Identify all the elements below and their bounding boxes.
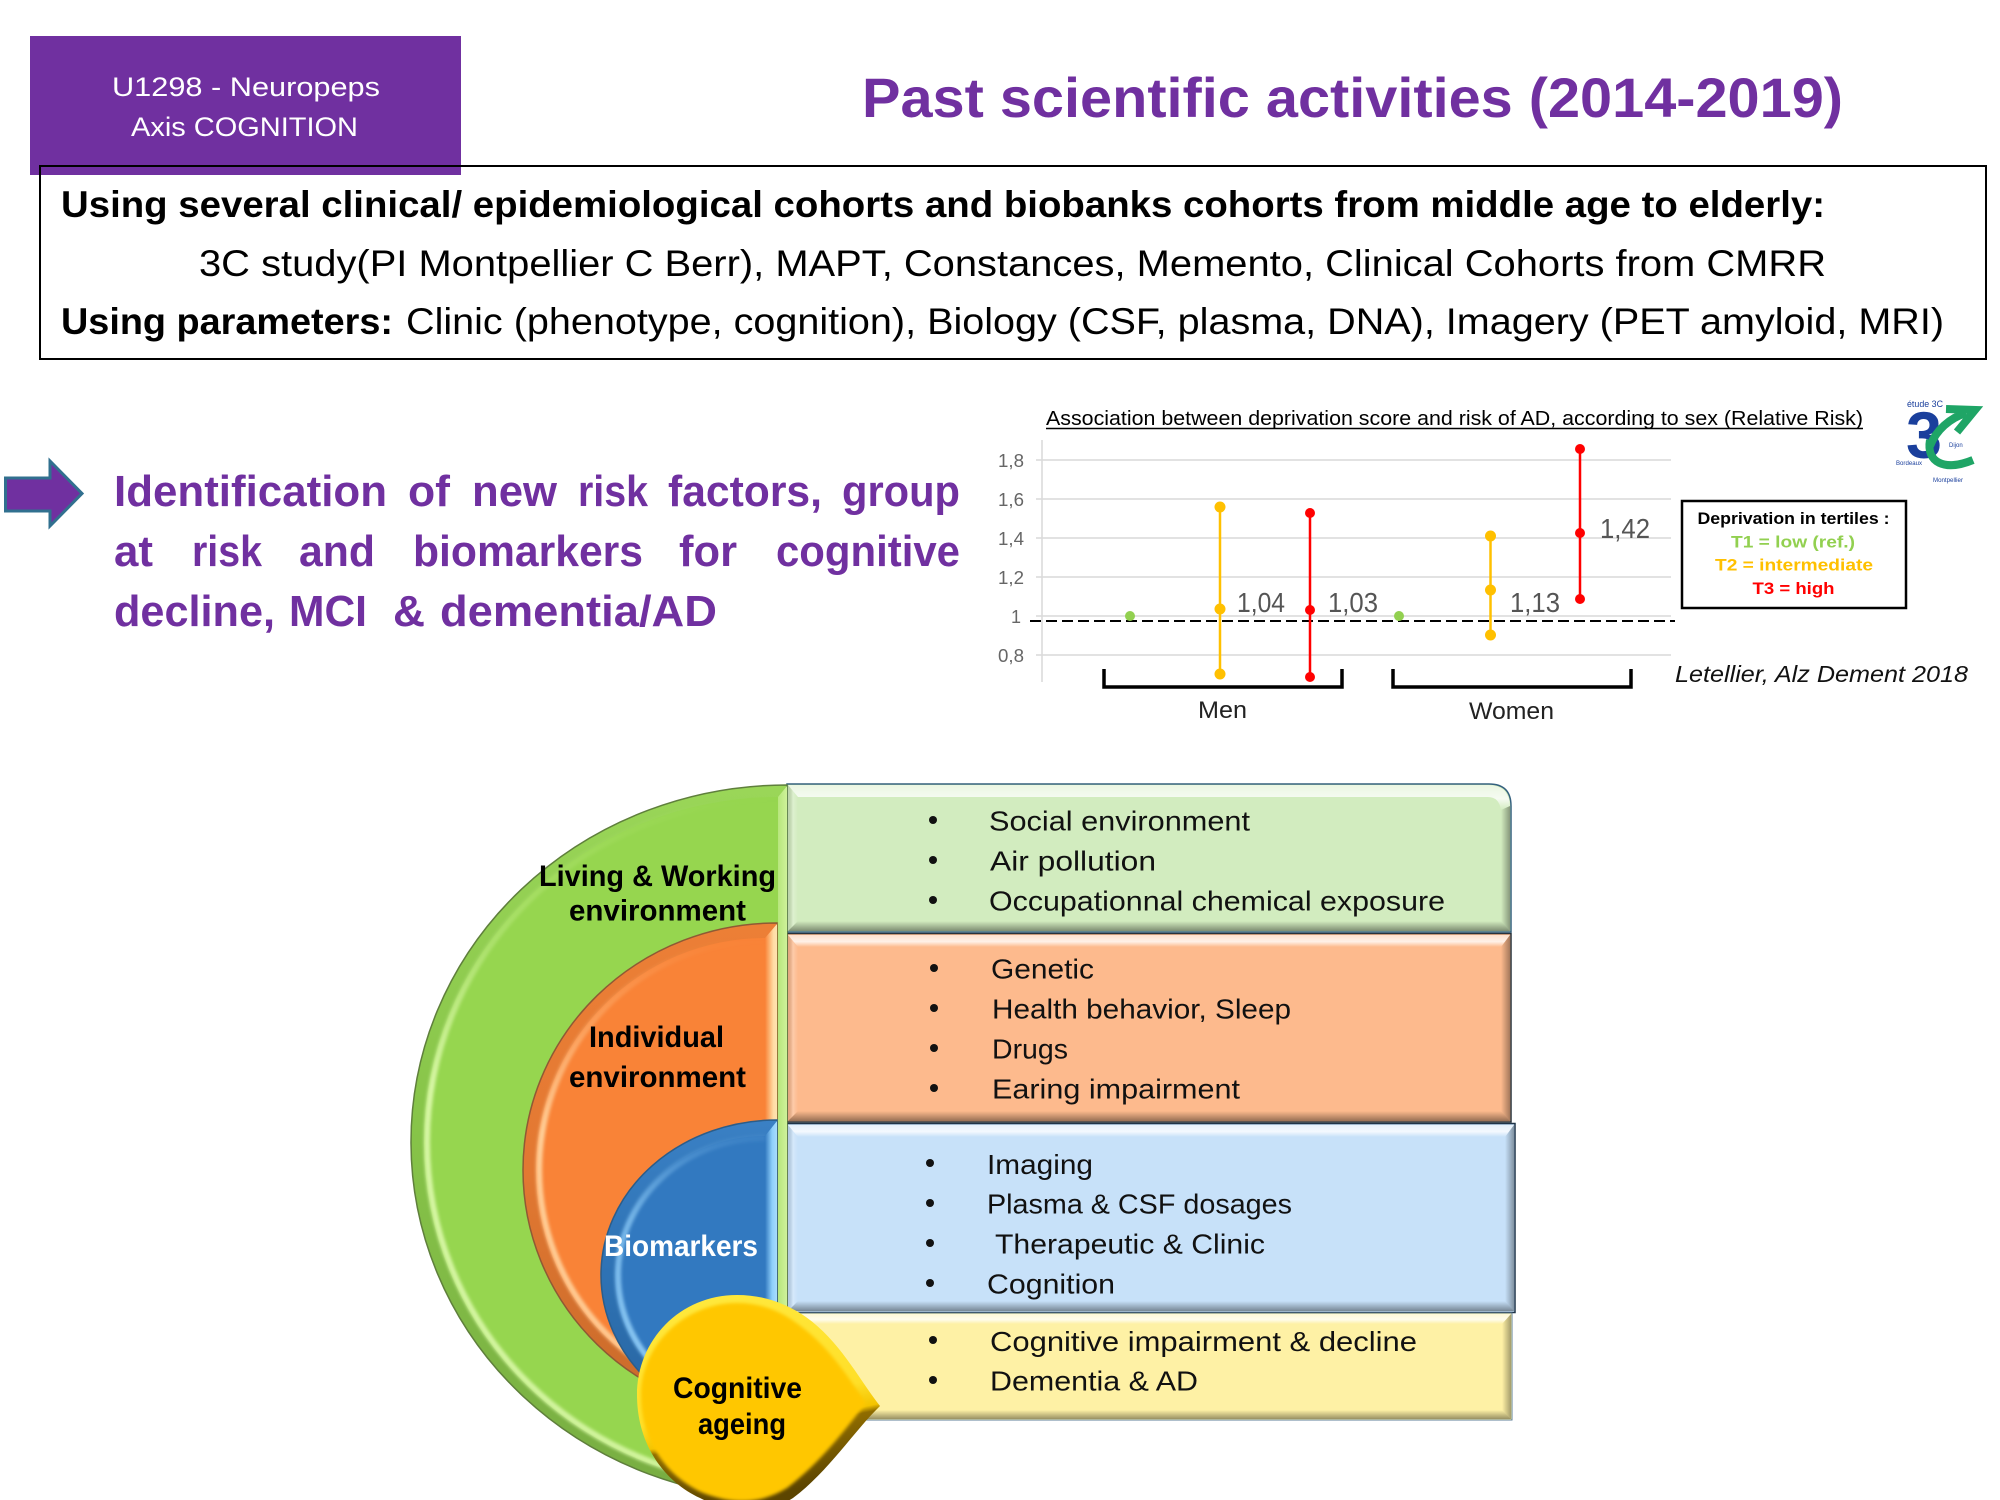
text block: identification of new risk factors (114, 467, 960, 636)
panel: individual list: Genetic (991, 954, 1094, 984)
data: T1 reference points (1125, 611, 1404, 621)
text block: identification of new risk factors: biomarkers (413, 527, 643, 576)
half circle: living and working environment: environment (569, 894, 746, 928)
panel: biomarkers list: Imaging (987, 1149, 1093, 1180)
half circle: individual environment: Individual (589, 1021, 724, 1054)
text block: identification of new risk factors: cognitive (776, 527, 960, 576)
data: women T3 (1575, 444, 1585, 604)
text block: identification of new risk factors: & (393, 587, 425, 636)
text block: identification of new risk factors: risk (192, 527, 262, 576)
panel: cognitive ageing list (787, 1313, 1512, 1420)
panel: cohorts and parameters (40, 166, 1986, 359)
half circle: individual environment (523, 923, 777, 1417)
value labels: 1,42 (1600, 513, 1650, 544)
panel: cohorts and parameters: 3C study(PI Montpellier C Berr), MAPT, Constances, Memento, Clinical Cohorts from CMRR (199, 243, 1826, 284)
text block: identification of new risk factors: risk (578, 467, 648, 516)
panel: individual list: Drugs (992, 1034, 1068, 1064)
bracket: men (1104, 669, 1342, 724)
panel: living and working list: Social environment (989, 806, 1250, 836)
text block: identification of new risk factors: of (408, 467, 450, 516)
y axis labels: 1,8 (998, 451, 1024, 471)
y axis labels: 1,2 (998, 568, 1024, 588)
panel: biomarkers list: Therapeutic & Clinic (995, 1228, 1265, 1260)
value labels: 1,13 (1510, 587, 1560, 618)
text block: identification of new risk factors: Identification (114, 467, 387, 516)
bracket: men: Men (1198, 697, 1247, 724)
data: women T2 (1485, 530, 1496, 640)
teardrop: cognitive ageing: ageing (698, 1408, 786, 1441)
data: men T3 (1305, 508, 1315, 682)
y axis labels (998, 451, 1024, 666)
bracket: women: Women (1469, 698, 1554, 725)
icon: etude 3C logo: Montpellier (1933, 478, 1963, 484)
icon: etude 3C logo: 3 (1906, 398, 1942, 472)
text block: identification of new risk factors: for (679, 527, 737, 576)
header badge: U1298 Neuropeps: U1298 - Neuropeps (112, 72, 380, 102)
panel: individual list (787, 934, 1511, 1122)
half circle: living and working environment (411, 785, 787, 1499)
citation: Letellier, Alz Dement 2018 (1675, 661, 1968, 687)
panel: living and working list: Air pollution (990, 846, 1156, 876)
legend: deprivation in tertiles: T3 = high (1752, 579, 1834, 598)
chart title: Association between deprivation score and risk of AD, according to sex (Relative Risk) (1046, 408, 1863, 430)
panel: living and working list (787, 784, 1511, 932)
panel: cognitive ageing list: Cognitive impairment & decline (990, 1326, 1417, 1357)
panel: cohorts and parameters: Clinic (phenotype, cognition), Biology (CSF, plasma, DNA), Imagery (PET amyloid, MRI) (406, 301, 1944, 342)
panel: cohorts and parameters: Using several clinical/ epidemiological cohorts and biobanks cohorts from middle age to elderly: (61, 184, 1825, 225)
half circle: biomarkers: Biomarkers (604, 1230, 758, 1263)
half circle: biomarkers (601, 1120, 777, 1430)
legend: deprivation in tertiles (1682, 501, 1906, 608)
panel: cohorts and parameters: Using parameters: (61, 301, 393, 342)
text block: identification of new risk factors: and (299, 527, 375, 576)
text block: identification of new risk factors: new (472, 467, 558, 516)
legend: deprivation in tertiles: T2 = intermediate (1715, 556, 1873, 574)
panel: biomarkers list (787, 1124, 1515, 1312)
half circle: individual environment: environment (569, 1061, 746, 1094)
half circle: living and working environment: Living & Working (539, 860, 776, 893)
panel: individual list: Health behavior, Sleep (992, 994, 1291, 1024)
value labels (1237, 513, 1650, 618)
header badge: U1298 Neuropeps: Axis COGNITION (131, 112, 358, 142)
y axis labels: 1 (1011, 607, 1021, 627)
y axis labels: 0,8 (998, 646, 1024, 666)
teardrop: cognitive ageing (637, 1295, 880, 1500)
chart: association between deprivation score and risk of AD (998, 408, 1968, 725)
title: Past scientific activities (2014-2019) (862, 66, 1843, 129)
y axis labels: 1,4 (998, 529, 1024, 549)
text block: identification of new risk factors: factors, (668, 467, 822, 516)
icon: etude 3C logo: étude 3C (1907, 399, 1943, 409)
text block: identification of new risk factors: dementia/AD (440, 587, 717, 636)
text block: identification of new risk factors: group (842, 467, 960, 516)
panel: biomarkers list: Cognition (987, 1268, 1115, 1300)
icon: arrow (6, 461, 82, 526)
teardrop: cognitive ageing: Cognitive (673, 1372, 802, 1405)
text block: identification of new risk factors: decline, (114, 587, 275, 636)
value labels: 1,03 (1328, 587, 1378, 618)
icon: etude 3C logo: Bordeaux (1896, 461, 1922, 467)
icon: etude 3C logo: Dijon (1949, 443, 1963, 449)
legend: deprivation in tertiles: T1 = low (ref.) (1731, 532, 1855, 552)
text block: identification of new risk factors: MCI (289, 587, 367, 636)
header badge: U1298 Neuropeps (30, 36, 461, 175)
panel: biomarkers list: Plasma & CSF dosages (987, 1188, 1292, 1220)
y axis labels: 1,6 (998, 490, 1024, 510)
legend: deprivation in tertiles: Deprivation in tertiles : (1698, 509, 1890, 528)
panel: cognitive ageing list: Dementia & AD (990, 1366, 1198, 1396)
data: men T2 (1214, 502, 1226, 680)
icon: etude 3C logo (1896, 398, 1975, 484)
value labels: 1,04 (1237, 587, 1285, 618)
text block: identification of new risk factors: at (114, 527, 153, 576)
panel: living and working list: Occupationnal chemical exposure (989, 886, 1445, 916)
bracket: women (1393, 669, 1631, 725)
panel: individual list: Earing impairment (992, 1074, 1240, 1104)
diagram: nested half circles (411, 785, 880, 1500)
